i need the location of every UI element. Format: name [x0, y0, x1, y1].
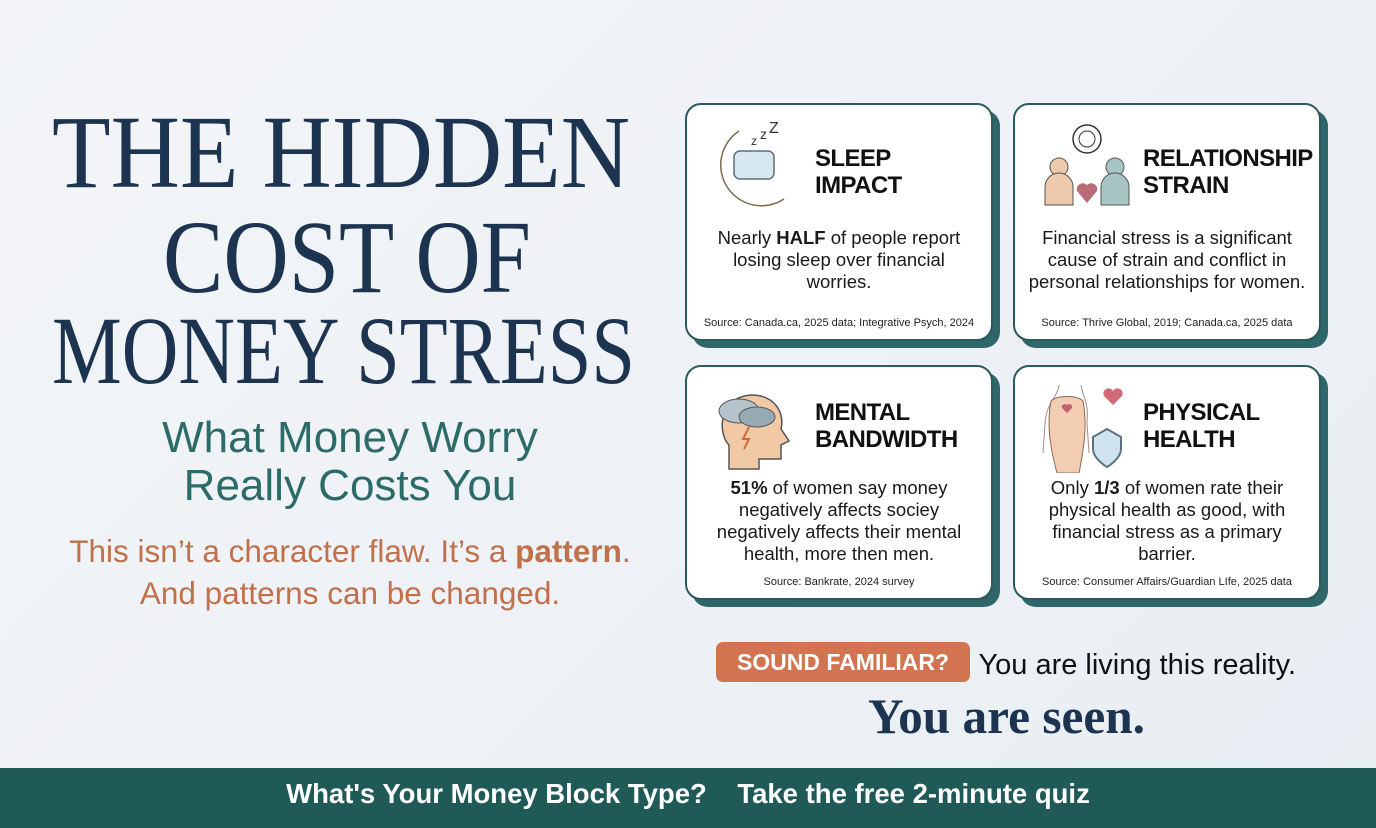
text: 51% of women say money [730, 477, 947, 498]
heading [1143, 145, 1313, 199]
tagline [69, 533, 631, 611]
source: Source: Canada.ca, 2025 data; Integrative Psych, 2024 [704, 317, 974, 329]
panel: mental bandwidth [685, 365, 993, 600]
text: physical health as good, with [1049, 499, 1285, 520]
footer bar: What's Your Money Block Type? Take the free 2-minute quiz [286, 778, 1090, 809]
text: barrier. [1138, 543, 1196, 564]
subtitle [162, 413, 538, 510]
text: health, more then men. [744, 543, 934, 564]
subtitle: Really Costs You [184, 461, 516, 510]
heading [815, 399, 958, 453]
text: financial stress as a primary [1052, 521, 1282, 542]
text: personal relationships for women. [1029, 271, 1305, 292]
heading: STRAIN [1143, 172, 1229, 199]
text [1049, 477, 1285, 564]
heading: BANDWIDTH [815, 426, 958, 453]
title: COST OF [163, 200, 531, 315]
tagline: And patterns can be changed. [140, 575, 560, 611]
text: losing sleep over financial [733, 249, 945, 270]
panel: relationship strain [1013, 103, 1321, 341]
icon: moon and pillow [720, 121, 784, 206]
footer bar [0, 768, 1376, 828]
tagline: This isn’t a character flaw. It’s a pattern. [69, 533, 631, 569]
badge [716, 642, 970, 682]
text: negatively affects their mental [717, 521, 961, 542]
heading: MENTAL [815, 399, 910, 426]
text [717, 477, 961, 564]
title: THE HIDDEN [52, 95, 630, 210]
text: Nearly HALF of people report [718, 227, 960, 248]
heading [1143, 399, 1260, 453]
icon: head with cloud [718, 394, 790, 470]
heading: RELATIONSHIP [1143, 145, 1313, 172]
heading: PHYSICAL [1143, 399, 1260, 426]
title [52, 95, 635, 400]
heading: IMPACT [815, 172, 902, 199]
heading: HEALTH [1143, 426, 1235, 453]
closing statement: You are seen. [868, 688, 1145, 744]
panel: physical health [1013, 365, 1321, 600]
subtitle: What Money Worry [162, 413, 538, 462]
text [1029, 227, 1305, 292]
badge: SOUND FAMILIAR? [737, 649, 949, 675]
heading [815, 145, 902, 199]
text: cause of strain and conflict in [1048, 249, 1286, 270]
callout: sound familiar [716, 642, 1296, 682]
text: Only 1/3 of women rate their [1051, 477, 1283, 498]
panel: sleep impact [685, 103, 993, 341]
icon: two people [1044, 124, 1130, 206]
source: Source: Bankrate, 2024 survey [763, 576, 915, 588]
heading: SLEEP [815, 145, 891, 172]
text: Financial stress is a significant [1042, 227, 1292, 248]
text [718, 227, 960, 292]
source: Source: Thrive Global, 2019; Canada.ca, 2025 data [1041, 317, 1293, 329]
icon: moon and pillow: z [751, 134, 757, 148]
statement: You are living this reality. [978, 649, 1296, 681]
icon: moon and pillow: z [760, 126, 767, 142]
source: Source: Consumer Affairs/Guardian LIfe, 2025 data [1042, 576, 1292, 588]
icon: body with heart and shield [1042, 384, 1123, 473]
text: worries. [807, 271, 871, 292]
text: negatively affects sociey [739, 499, 939, 520]
